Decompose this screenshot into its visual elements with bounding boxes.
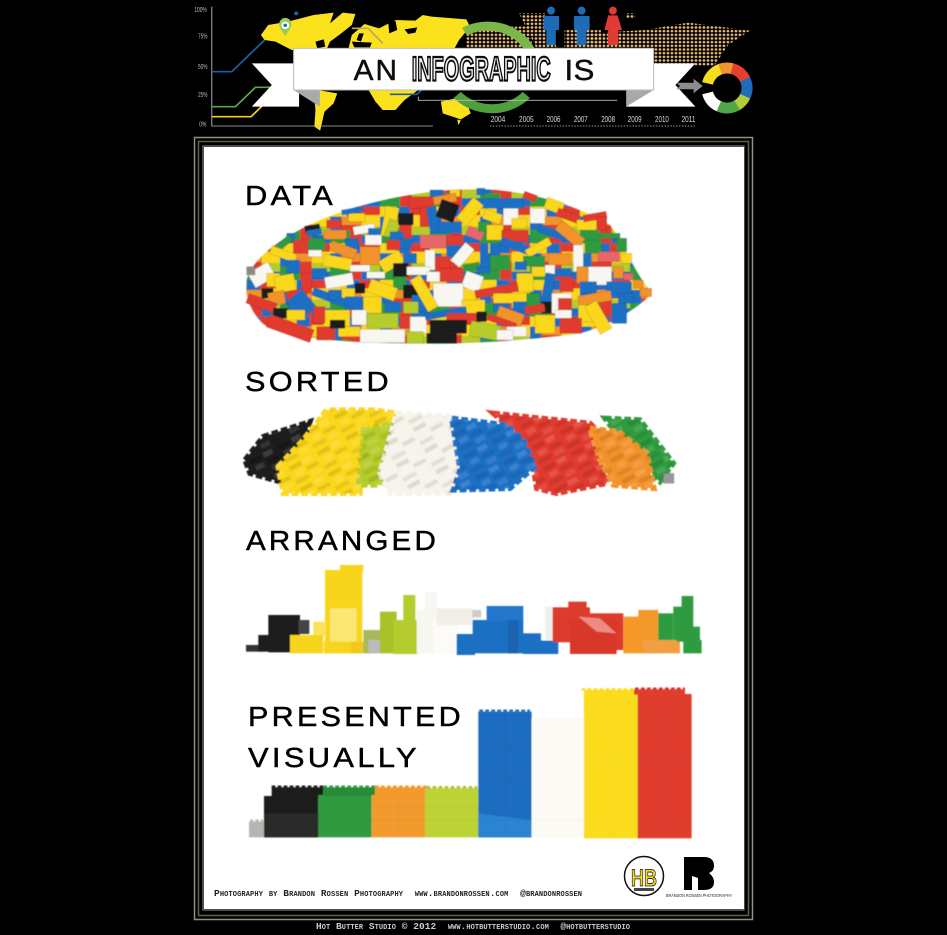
arrow bbox=[676, 79, 703, 93]
heading: presented visually bbox=[248, 701, 464, 773]
year labels: 2005 bbox=[519, 114, 534, 124]
ribbon left fold bbox=[294, 90, 320, 107]
ribbon right tail bbox=[626, 63, 695, 107]
axis labels: 0% bbox=[199, 120, 207, 129]
blue bar bbox=[478, 711, 532, 837]
icon: map pin bbox=[279, 11, 298, 36]
axis labels: 25% bbox=[198, 90, 208, 99]
title text: INFOGRAPHIC bbox=[412, 49, 551, 88]
red bar bbox=[634, 689, 692, 838]
year labels: 2006 bbox=[547, 114, 561, 124]
year labels: 2004 bbox=[491, 114, 505, 124]
poster white panel bbox=[204, 147, 744, 909]
heading: sorted: SORTED bbox=[245, 366, 392, 397]
green pile bbox=[605, 418, 674, 483]
year labels: 2011 bbox=[682, 114, 696, 124]
green stack bbox=[658, 596, 702, 653]
line chart axes bbox=[212, 7, 617, 126]
year labels: 2009 bbox=[628, 114, 642, 124]
icon: woman bbox=[605, 7, 622, 45]
footer credit: Hot Butter Studio © 2012 www.hotbutterstudio.com @hotbutterstudio bbox=[316, 921, 630, 932]
title banner bbox=[294, 48, 654, 90]
blue pile bbox=[452, 418, 535, 490]
orange pile bbox=[590, 428, 654, 488]
lime bar bbox=[425, 787, 478, 837]
year labels bbox=[491, 114, 696, 124]
axis labels: 100% bbox=[194, 5, 207, 14]
header graphic bbox=[194, 5, 750, 131]
year labels: 2010 bbox=[655, 114, 669, 124]
heading: presented visually: VISUALLY bbox=[248, 742, 420, 773]
logo: hot butter bbox=[624, 856, 664, 896]
logo: brandon rossen photography bbox=[666, 857, 732, 898]
bar chart of lego columns bbox=[249, 689, 692, 838]
map inlets bbox=[315, 21, 417, 48]
brick seams bbox=[264, 690, 692, 837]
white pile bbox=[380, 413, 460, 493]
icon: man two bbox=[574, 7, 590, 45]
yellow world map bbox=[261, 13, 471, 131]
poster frame bbox=[194, 138, 752, 920]
orange bar bbox=[372, 787, 427, 837]
photography credit: Photography by Brandon Rossen Photography www.brandonrossen.com @brandonrossen bbox=[214, 888, 582, 899]
lego pile: sorted by colour bbox=[243, 407, 677, 495]
dotted year baseline bbox=[490, 124, 696, 127]
green bar bbox=[318, 787, 375, 837]
heading: presented visually: PRESENTED bbox=[248, 701, 464, 732]
title text: AN bbox=[354, 55, 399, 87]
axis labels: 50% bbox=[198, 62, 208, 71]
ribbon left tail bbox=[252, 63, 299, 107]
donut chart bbox=[700, 61, 754, 115]
white bar bbox=[532, 718, 584, 837]
year labels: 2008 bbox=[601, 114, 615, 124]
logo: brandon rossen photography: BRANDON ROSSEN PHOTOGRAPHY bbox=[666, 893, 732, 898]
title text: IS bbox=[565, 55, 594, 87]
white stack bbox=[417, 592, 481, 653]
blue stack bbox=[457, 606, 558, 655]
title text bbox=[354, 49, 594, 88]
logo: hot butter: HB bbox=[631, 865, 657, 892]
black stack bbox=[246, 615, 309, 652]
green ring bbox=[457, 26, 530, 109]
axis labels: 75% bbox=[198, 32, 208, 40]
line chart series bbox=[212, 28, 423, 117]
yellow pile bbox=[278, 410, 397, 493]
ribbon right fold bbox=[626, 90, 654, 107]
lime pile bbox=[358, 423, 393, 485]
grey bar bbox=[249, 821, 264, 837]
heading: arranged: ARRANGED bbox=[246, 525, 439, 556]
lime stack bbox=[363, 595, 418, 654]
red pile bbox=[493, 413, 607, 493]
axis labels bbox=[194, 5, 208, 129]
dotted world map bbox=[466, 13, 750, 67]
yellow bar bbox=[582, 689, 638, 838]
icon: man one bbox=[543, 7, 559, 45]
heading: data: DATA bbox=[245, 180, 336, 211]
black bar bbox=[264, 787, 323, 837]
yellow stack bbox=[290, 565, 372, 653]
red stack bbox=[545, 602, 623, 654]
lego pile: data bbox=[246, 188, 652, 344]
black pile bbox=[245, 422, 310, 482]
year labels: 2007 bbox=[574, 114, 588, 124]
orange stack bbox=[623, 610, 680, 653]
lego stacks: arranged bbox=[246, 565, 702, 655]
brick texture bbox=[243, 407, 677, 495]
